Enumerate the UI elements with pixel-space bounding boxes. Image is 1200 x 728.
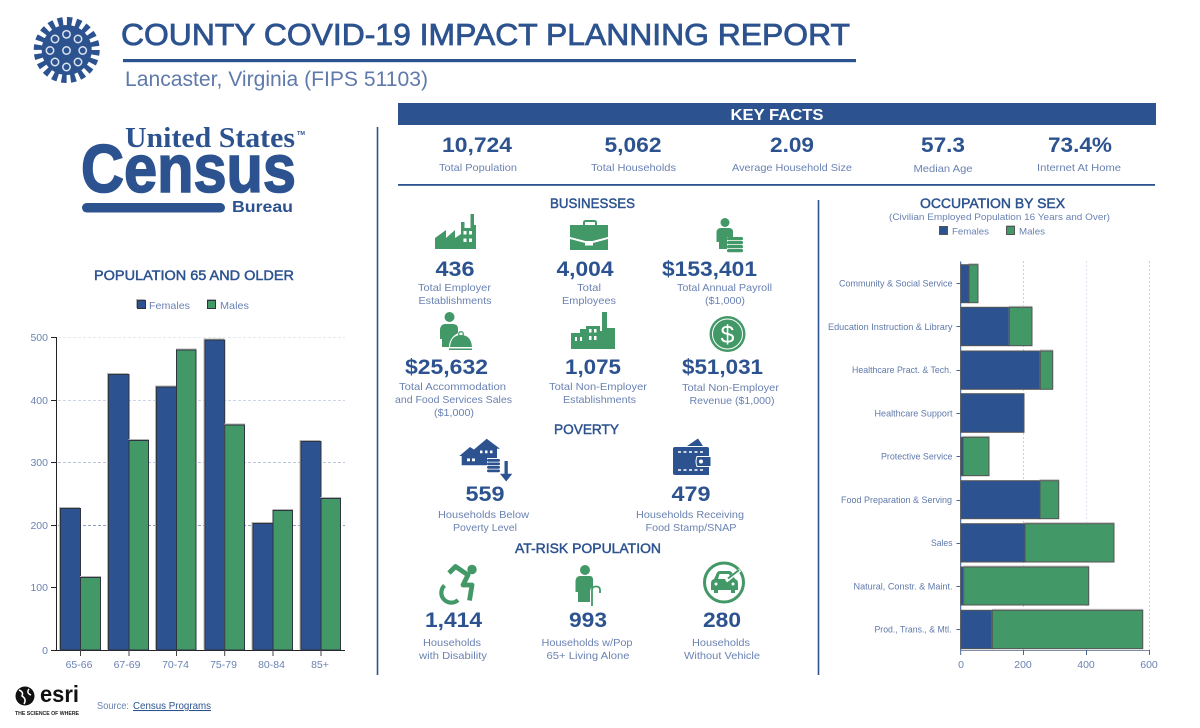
- stat: living alone: [542, 565, 633, 662]
- stat: households below poverty: [438, 439, 529, 534]
- icon: wheelchair: [441, 565, 477, 603]
- row: sales: Sales: [931, 538, 953, 549]
- logo: United States Census Bureau: Bureau: [232, 199, 293, 216]
- legend: Females: [149, 300, 190, 312]
- stat: average household size: [732, 134, 852, 174]
- logo: esri: THE SCIENCE OF WHERE: [15, 711, 79, 717]
- icon: dollar coin: $: [721, 321, 735, 349]
- chart title: OCCUPATION BY SEX: [920, 196, 1065, 211]
- row: community and social service: [839, 265, 978, 303]
- row: healthcare support: [874, 394, 1024, 432]
- axes: [956, 262, 1158, 671]
- icon: small factory: [571, 312, 615, 349]
- stat: food stamp households: 479: [672, 483, 710, 506]
- axes: 400: [1077, 659, 1095, 671]
- stat: median age: Median Age: [914, 163, 973, 175]
- heading: at-risk population: AT-RISK POPULATION: [515, 541, 661, 556]
- row: natural, construction, maintenance: Natural, Constr. & Maint.: [854, 582, 952, 592]
- logo: esri: esri: [40, 681, 79, 707]
- x axis labels: 70-74: [162, 659, 189, 671]
- row: healthcare practitioners: [852, 351, 1053, 389]
- stat: median age: 57.3: [921, 134, 965, 157]
- stat: accommodation and food sales: [395, 312, 512, 419]
- legend: Males: [1019, 226, 1045, 238]
- stat: average household size: Average Household Size: [732, 162, 852, 174]
- x axis labels: 65-66: [66, 659, 93, 671]
- icon: down arrow: [500, 461, 512, 482]
- stat: annual payroll: ($1,000): [705, 295, 745, 307]
- stat: total households: [591, 134, 676, 174]
- y axis: [30, 332, 345, 657]
- icon: person with cane: [576, 565, 600, 606]
- bars: 70-74: [156, 350, 196, 650]
- stat: total employees: [556, 221, 616, 307]
- source line: [97, 700, 211, 712]
- panel: businesses: [395, 196, 780, 419]
- icon: factory: [435, 214, 476, 249]
- row: production, transportation, material: Prod., Trans., & Mtl.: [874, 624, 952, 636]
- legend: [940, 226, 1045, 238]
- stat: average household size: 2.09: [770, 134, 814, 157]
- y axis: 400: [30, 395, 48, 407]
- stat: living alone: Households w/Pop: [542, 637, 633, 649]
- stat: without vehicle: Households: [692, 637, 750, 649]
- row: natural, construction, maintenance: [854, 567, 1089, 605]
- chart: population 65 and older: [30, 268, 345, 671]
- stat: total population: [439, 134, 517, 174]
- stat: employer establishments: [418, 214, 492, 307]
- stat: households with disability: 1,414: [425, 609, 482, 632]
- y axis: 300: [30, 457, 48, 469]
- axes: 600: [1140, 659, 1158, 671]
- icon: person with cloche: [440, 312, 472, 350]
- stat: employer establishments: Establishments: [418, 295, 492, 307]
- stat: internet at home: [1037, 134, 1121, 174]
- stat: internet at home: Internet At Home: [1037, 162, 1121, 174]
- icon: person with coins: [716, 218, 743, 252]
- stat: households with disability: with Disability: [418, 650, 488, 662]
- stat: total employees: Employees: [562, 295, 616, 307]
- stat: employer establishments: Total Employer: [418, 282, 492, 294]
- chart title: POPULATION 65 AND OLDER: [94, 268, 294, 283]
- icon: houses with coins and arrow: [459, 439, 512, 482]
- stat: accommodation and food sales: $25,632: [405, 356, 488, 379]
- x axis labels: [66, 650, 329, 671]
- legend: [138, 300, 249, 312]
- stat: living alone: 65+ Living Alone: [546, 650, 630, 662]
- row: food preparation: [841, 481, 1059, 519]
- bars: 80-84: [253, 510, 292, 650]
- logo: United States Census Bureau: TM: [297, 131, 305, 137]
- x axis labels: 80-84: [258, 659, 285, 671]
- row: healthcare practitioners: Healthcare Pract. & Tech.: [852, 365, 952, 376]
- axes: 200: [1014, 659, 1032, 671]
- logo: United States Census Bureau: United States: [125, 123, 295, 154]
- stat: without vehicle: Without Vehicle: [684, 650, 760, 662]
- x axis labels: 67-69: [114, 659, 141, 671]
- key facts banner: [398, 103, 1156, 125]
- stat: food stamp households: Households Receiving: [636, 509, 744, 521]
- stat: food stamp households: Food Stamp/SNAP: [646, 522, 736, 534]
- bars: 65-66: [60, 508, 100, 650]
- source line: Source:: [97, 700, 129, 712]
- icon: briefcase: [570, 221, 608, 250]
- stat: accommodation and food sales: ($1,000): [434, 407, 474, 419]
- legend: Females: [952, 226, 989, 238]
- stat: total households: 5,062: [604, 134, 662, 157]
- stat: households with disability: Households: [423, 637, 481, 649]
- icon: wallet: [673, 438, 711, 475]
- row: education: [828, 307, 1032, 346]
- stat: annual payroll: [662, 218, 772, 307]
- stat: total population: 10,724: [442, 134, 512, 157]
- stat: median age: [914, 134, 973, 175]
- stat: non-employer revenue: Revenue ($1,000): [690, 395, 774, 407]
- title: COUNTY COVID-19 IMPACT PLANNING REPORT: [121, 17, 850, 52]
- chart subtitle: (Civilian Employed Population 16 Years and Over): [889, 212, 1110, 223]
- stat: accommodation and food sales: Total Accommodation: [399, 381, 506, 393]
- y axis: 500: [30, 332, 48, 344]
- stat: non-employer revenue: $51,031: [682, 356, 763, 379]
- stat: non-employer establishments: 1,075: [565, 356, 621, 379]
- stat: without vehicle: 280: [703, 609, 741, 632]
- source line: Census Programs: [133, 700, 211, 712]
- stat: without vehicle: [684, 563, 760, 662]
- legend: Males: [220, 300, 249, 312]
- stat: internet at home: 73.4%: [1048, 134, 1112, 157]
- stat: total population: Total Population: [439, 162, 517, 174]
- stat: food stamp households: [636, 438, 744, 534]
- bars: 75-79: [205, 340, 244, 650]
- stat: households with disability: [418, 565, 488, 662]
- panel: key facts: [398, 103, 1156, 186]
- panel: poverty: [438, 422, 744, 534]
- stat: accommodation and food sales: and Food Services Sales: [395, 394, 512, 406]
- subtitle: Lancaster, Virginia (FIPS 51103): [125, 68, 428, 91]
- icon: no car: [704, 563, 744, 602]
- stat: total households: Total Households: [591, 162, 676, 174]
- row: education: Education Instruction & Library: [828, 322, 953, 333]
- row: protective service: Protective Service: [881, 452, 952, 462]
- stat: employer establishments: 436: [436, 258, 474, 281]
- panel: at-risk population: [418, 541, 760, 662]
- x axis labels: 85+: [311, 659, 329, 671]
- icon: virus: [38, 22, 95, 78]
- stat: households below poverty: 559: [466, 483, 504, 506]
- axes: 0: [958, 659, 964, 671]
- stat: living alone: 993: [569, 609, 607, 632]
- x axis labels: 75-79: [210, 659, 237, 671]
- logo: esri: [15, 681, 79, 717]
- stat: total employees: Total: [577, 282, 601, 294]
- stat: non-employer revenue: Total Non-Employer: [682, 382, 780, 394]
- key facts banner: KEY FACTS: [730, 107, 824, 124]
- stat: households below poverty: Poverty Level: [453, 522, 517, 534]
- heading: businesses: BUSINESSES: [550, 196, 635, 211]
- logo: United States Census Bureau: Census: [81, 131, 296, 207]
- stat: non-employer establishments: Total Non-Employer: [549, 381, 648, 393]
- y axis: 100: [30, 582, 48, 594]
- stat: total employees: 4,004: [556, 258, 614, 281]
- stat: annual payroll: Total Annual Payroll: [677, 282, 772, 294]
- stat: annual payroll: $153,401: [662, 258, 757, 281]
- row: community and social service: Community & Social Service: [839, 278, 952, 290]
- row: production, transportation, material: [874, 610, 1143, 649]
- stat: non-employer establishments: Establishments: [563, 394, 636, 406]
- row: food preparation: Food Preparation & Serving: [841, 495, 952, 506]
- bars: 85+: [301, 442, 340, 650]
- y axis: 200: [30, 520, 48, 532]
- heading: poverty: POVERTY: [554, 422, 619, 437]
- stat: households below poverty: Households Below: [438, 509, 529, 521]
- stat: non-employer revenue: [682, 316, 780, 407]
- row: protective service: [881, 437, 989, 476]
- bars: 67-69: [108, 374, 148, 650]
- chart: occupation by sex: [828, 196, 1158, 671]
- y axis: 0: [42, 645, 48, 657]
- row: healthcare support: Healthcare Support: [874, 408, 953, 420]
- row: sales: [931, 524, 1114, 562]
- stat: non-employer establishments: [549, 312, 648, 406]
